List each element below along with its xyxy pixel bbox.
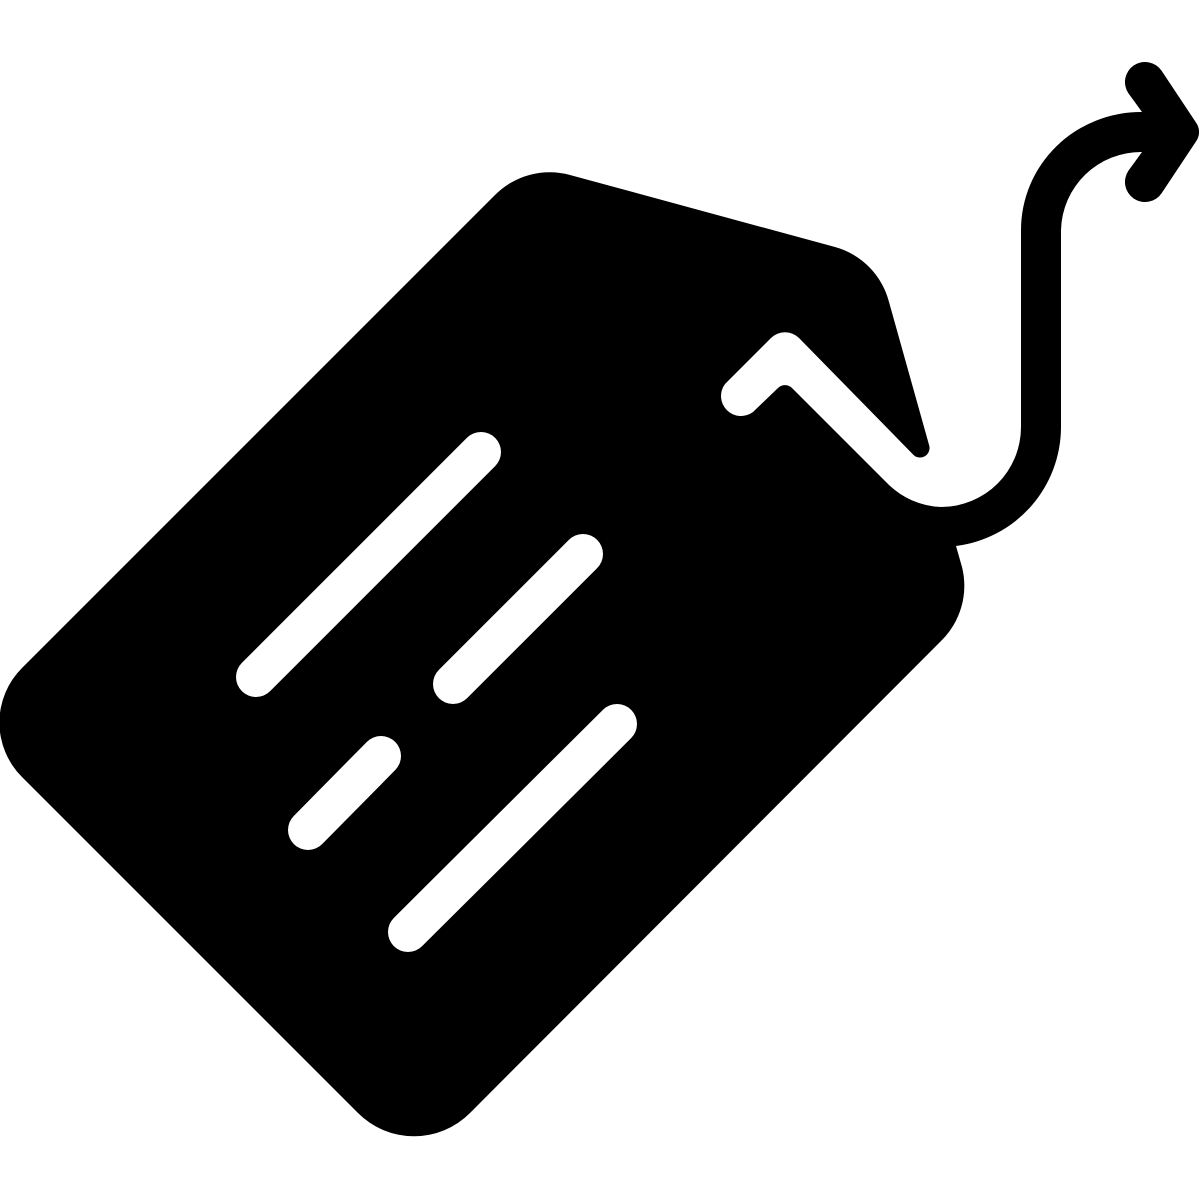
text line 2 <box>453 554 583 684</box>
text line 1 <box>256 452 481 677</box>
text line 4 <box>408 724 617 932</box>
text line 3 <box>308 756 381 830</box>
